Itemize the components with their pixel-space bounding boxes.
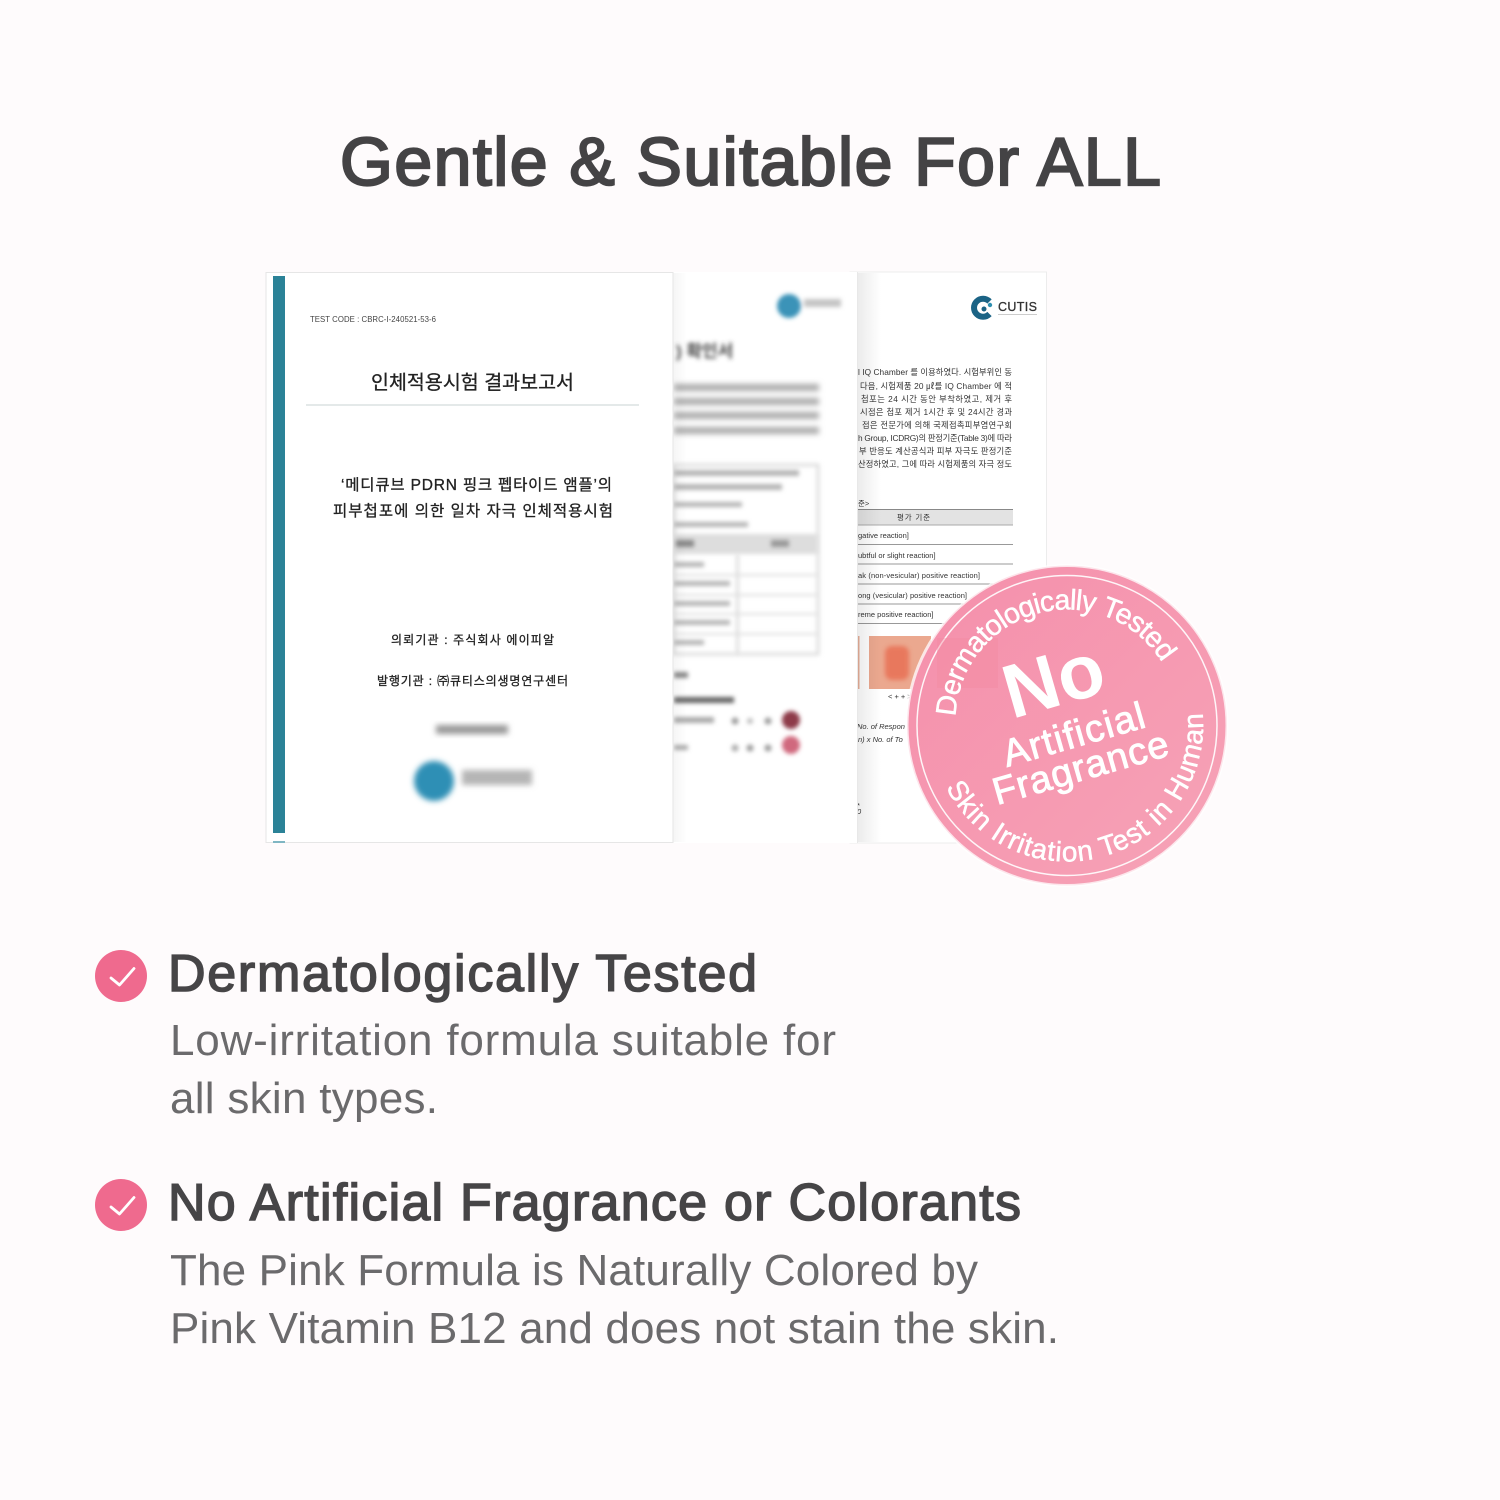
cutis logo bbox=[974, 299, 1037, 317]
report subtitle: ‘메디큐브 PDRN 핑크 펩타이드 앰플’의 bbox=[341, 476, 612, 494]
blurred paragraph bbox=[674, 384, 819, 434]
skin reaction photos bbox=[850, 636, 931, 701]
institutions bbox=[377, 633, 568, 688]
method text: 접은 전문가에 의해 국제접촉피부염연구회 bbox=[862, 420, 1012, 430]
description: The Pink Formula is Naturally Colored by bbox=[170, 1246, 978, 1295]
method text bbox=[858, 367, 1012, 469]
method text: 산정하였고, 그에 따라 시험제품의 자극 정도 bbox=[858, 459, 1012, 469]
blurred logo bbox=[777, 294, 841, 318]
evaluation table: reme positive reaction] bbox=[858, 610, 933, 619]
method text: 부 반응도 계산공식과 피부 자극도 판정기준 bbox=[859, 446, 1012, 456]
teal spine bbox=[273, 276, 285, 833]
method text: h Group, ICDRG)의 판정기준(Table 3)에 따라 bbox=[858, 433, 1012, 443]
method text: 첩포는 24 시간 동안 부착하였고, 제거 후 bbox=[861, 394, 1012, 404]
badge center text: Artificial bbox=[998, 695, 1150, 776]
institutions: 발행기관 : ㈜큐티스의생명연구센터 bbox=[377, 673, 568, 688]
cutis logo: CUTIS bbox=[998, 300, 1037, 314]
blurred signatures bbox=[674, 672, 800, 754]
evaluation table: ubtful or slight reaction] bbox=[858, 551, 936, 560]
badge center text: No bbox=[993, 626, 1114, 735]
badge center text bbox=[988, 626, 1173, 814]
institutions: 의뢰기관 : 주식회사 에이피알 bbox=[391, 633, 554, 647]
report document spread bbox=[266, 272, 1046, 843]
formula: 0 bbox=[857, 807, 862, 816]
evaluation table: gative reaction] bbox=[858, 531, 909, 540]
description bbox=[170, 1246, 1059, 1353]
icon: check bbox=[95, 1179, 147, 1231]
report title: 인체적용시험 결과보고서 bbox=[371, 372, 574, 394]
heading: Dermatologically Tested bbox=[168, 945, 757, 1003]
icon: check bbox=[95, 950, 147, 1002]
curved text bottom: Skin Irritation Test in Human bbox=[948, 714, 1204, 862]
heading: No Artificial Fragrance or Colorants bbox=[168, 1174, 1021, 1232]
evaluation table: ak (non-vesicular) positive reaction] bbox=[858, 571, 980, 580]
curved text top: Dermatologically Tested bbox=[936, 588, 1178, 715]
page 1: report cover bbox=[266, 272, 673, 843]
badge: no artificial fragrance bbox=[907, 566, 1227, 886]
blurred logo bbox=[414, 761, 532, 801]
evaluation table bbox=[850, 499, 1013, 624]
title: Gentle & Suitable For ALL bbox=[340, 124, 1161, 200]
badge center text: Fragrance bbox=[988, 723, 1173, 814]
method text: 시점은 첩포 제거 1시간 후 및 24시간 경과 bbox=[860, 407, 1012, 417]
page 3: test method bbox=[850, 272, 1046, 843]
skin reaction photos: < + + > bbox=[888, 692, 912, 701]
blurred date bbox=[436, 725, 508, 734]
report subtitle bbox=[333, 476, 613, 520]
method text: l IQ Chamber 를 이용하였다. 시험부위인 동 bbox=[858, 367, 1012, 377]
page 2: blurred confirmation bbox=[673, 272, 881, 843]
method text: 다음, 시험제품 20 ㎕를 IQ Chamber 에 적 bbox=[860, 381, 1012, 392]
formula: No. of Respon bbox=[857, 722, 905, 731]
benefit 2: no artificial fragrance or colorants bbox=[95, 1174, 1059, 1353]
test code: TEST CODE : CBRC-I-240521-53-6 bbox=[310, 315, 436, 324]
evaluation table: 준> bbox=[858, 499, 870, 508]
description: Pink Vitamin B12 and does not stain the skin. bbox=[170, 1304, 1059, 1353]
evaluation table: ong (vesicular) positive reaction] bbox=[858, 591, 967, 600]
formula bbox=[857, 722, 905, 816]
formula: * bbox=[857, 801, 860, 810]
faded page photo under badge bbox=[937, 638, 998, 688]
description bbox=[170, 1016, 836, 1123]
benefit 1: dermatologically tested bbox=[95, 945, 836, 1123]
blurred heading: ) 확인서 bbox=[676, 342, 733, 361]
description: all skin types. bbox=[170, 1074, 438, 1123]
formula: n) x No. of To bbox=[858, 735, 903, 744]
page edge shadow bbox=[857, 273, 881, 842]
report subtitle: 피부첩포에 의한 일차 자극 인체적용시험 bbox=[333, 502, 613, 520]
description: Low-irritation formula suitable for bbox=[170, 1016, 836, 1065]
blurred table bbox=[674, 465, 818, 654]
evaluation table: 평가 기준 bbox=[897, 512, 930, 522]
